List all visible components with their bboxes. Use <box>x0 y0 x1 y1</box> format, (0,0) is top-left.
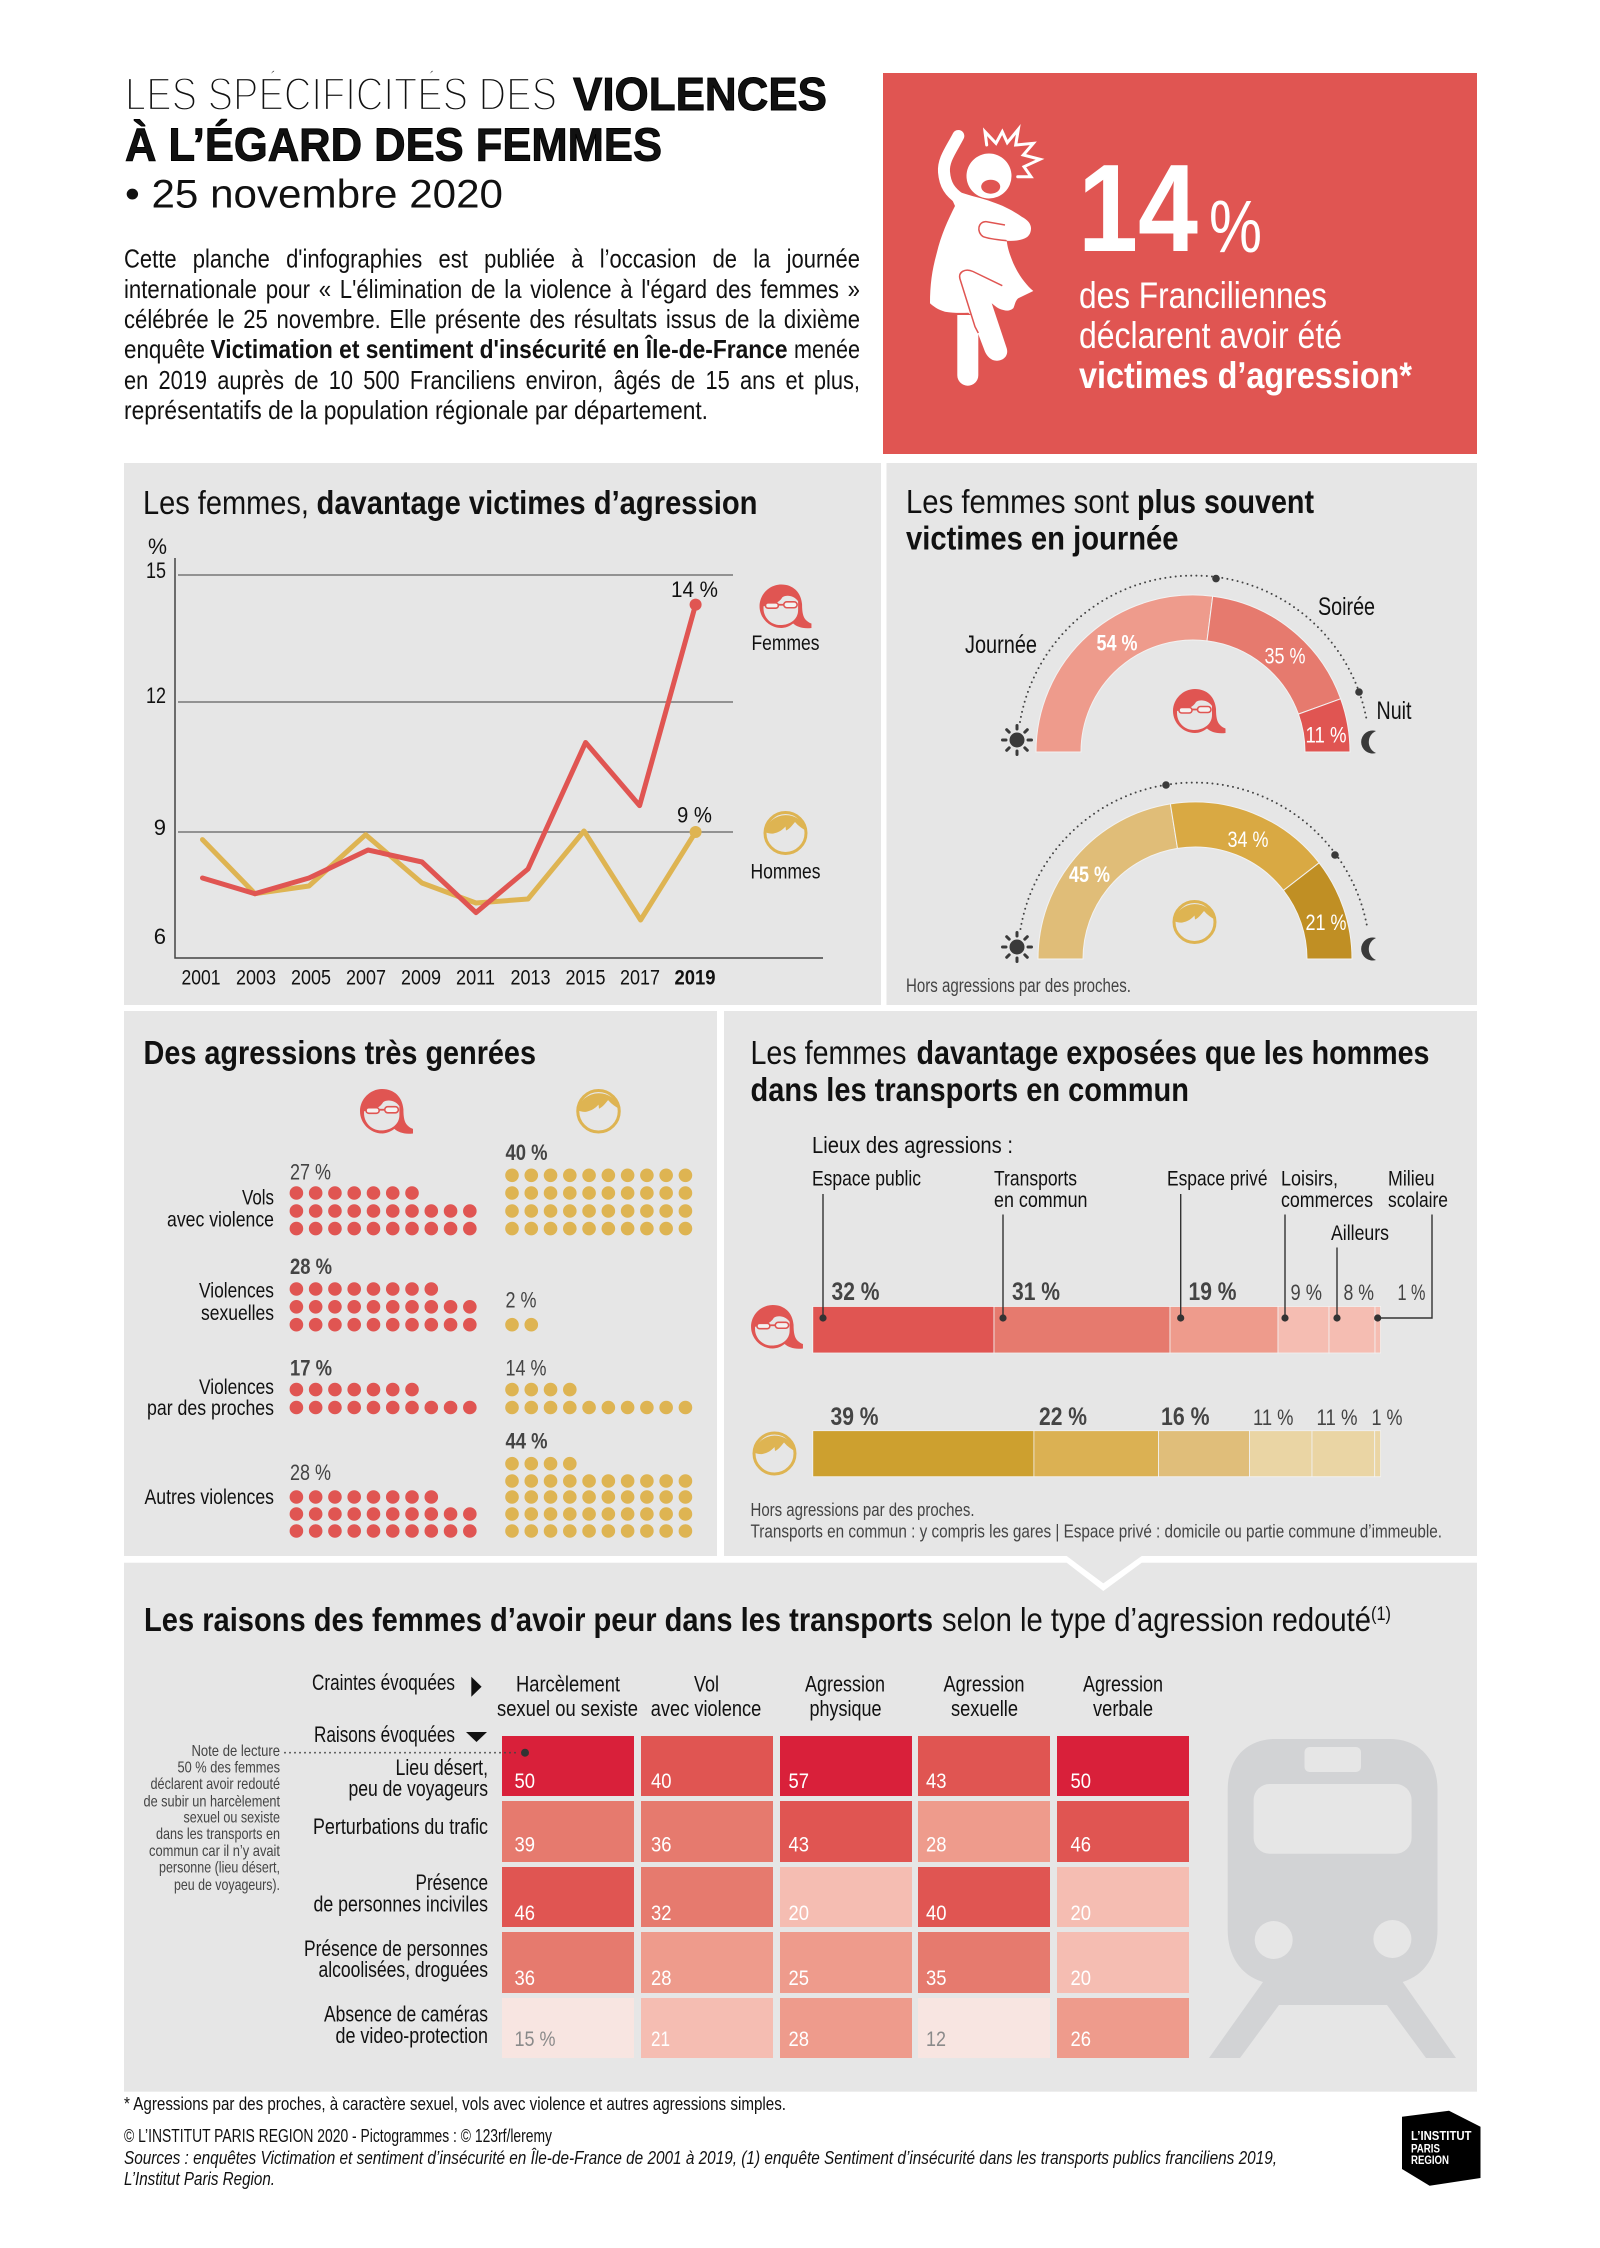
footnote: * Agressions par des proches, à caractère sexuel, vols avec violence et autres agressions simples. <box>124 2094 786 2114</box>
percent labels <box>290 1140 548 1485</box>
row labels: alcoolisées, droguées <box>318 1957 488 1982</box>
legend: femmes: Femmes <box>752 632 820 655</box>
panel: time of day gauges <box>886 463 1477 1005</box>
column headers: Agression <box>805 1672 885 1696</box>
values: hommes: 11 % <box>1316 1405 1358 1430</box>
heatmap row: absence de caméras <box>502 1998 1189 2058</box>
percent labels: 40 % <box>506 1140 548 1165</box>
intro paragraph: menée <box>794 334 860 364</box>
heatmap row: personnes inciviles: 20 <box>788 1902 809 1925</box>
row labels: Présence de personnes <box>304 1936 488 1961</box>
category labels: Milieu <box>1388 1168 1434 1190</box>
column headers: Agression <box>944 1672 1024 1696</box>
row labels: peu de voyageurs <box>348 1776 488 1801</box>
key figure caption: victimes d’agression* <box>1079 355 1413 396</box>
big number: 14 <box>1078 140 1198 278</box>
column headers <box>497 1672 1163 1721</box>
row labels: avec violence <box>167 1208 274 1232</box>
line: femmes <box>202 599 702 913</box>
gauge: femmes <box>965 575 1412 754</box>
heatmap row: personnes alcoolisées: 20 <box>1070 1967 1091 1990</box>
x axis labels: 2015 <box>566 966 606 990</box>
y axis labels: % <box>148 534 167 559</box>
heading: Les raisons des femmes d’avoir peur dans les transports <box>144 1601 933 1638</box>
gauge: femmes: Soirée <box>1318 593 1375 621</box>
axis titles: Craintes évoquées <box>312 1670 455 1695</box>
column headers: Agression <box>1083 1672 1163 1696</box>
x axis labels: 2007 <box>346 966 386 990</box>
values: femmes: 1 % <box>1398 1280 1426 1305</box>
category labels: Espace public <box>812 1168 921 1190</box>
row labels: Présence <box>416 1870 488 1895</box>
values: hommes: 16 % <box>1161 1403 1210 1431</box>
heading: dans les transports en commun <box>750 1071 1189 1108</box>
title <box>125 68 827 216</box>
big number: % <box>1209 185 1262 268</box>
row labels: Autres violences <box>144 1486 274 1509</box>
x axis labels: 2009 <box>401 966 441 990</box>
heatmap row: absence de caméras: 12 <box>926 2028 946 2051</box>
credits and sources <box>124 2126 1277 2189</box>
row labels: de personnes inciviles <box>314 1892 488 1916</box>
heading: Les femmes sont <box>906 483 1129 520</box>
dots: hommes <box>512 1175 686 1531</box>
intro paragraph: internationale pour « L'élimination de la violence à l'égard des femmes » <box>124 274 860 304</box>
category labels: scolaire <box>1388 1189 1448 1212</box>
credits and sources: Sources : enquêtes Victimation et sentiment d’insécurité en Île-de-France de 2001 à 2019, (1) enquête Sentiment d’insécurité dans les transports publics franciliens 2019, <box>124 2148 1277 2168</box>
category labels: commerces <box>1281 1189 1373 1212</box>
y axis labels: 15 <box>146 558 166 583</box>
heading: (1) <box>1371 1604 1391 1625</box>
reading note: commun car il n’y avait <box>149 1843 280 1860</box>
icon: homme <box>754 1433 796 1474</box>
values: hommes: 1 % <box>1372 1405 1402 1430</box>
reading note pointer <box>285 1749 529 1757</box>
heatmap row: lieu désert: 50 <box>514 1770 535 1793</box>
intro paragraph: Cette planche d'infographies est publiée à l’occasion de la journée <box>124 244 860 274</box>
column headers: verbale <box>1093 1696 1153 1721</box>
x axis labels: 2017 <box>620 966 660 990</box>
heatmap row: personnes alcoolisées: 35 <box>926 1967 946 1990</box>
gauge: femmes: 35 % <box>1264 644 1306 668</box>
pointer chevron <box>1067 1556 1142 1591</box>
row labels: Lieu désert, <box>396 1755 488 1780</box>
x axis labels: 2011 <box>456 966 495 990</box>
end value: hommes: 9 % <box>677 802 712 828</box>
key figure caption <box>1079 275 1413 396</box>
heatmap row: personnes alcoolisées <box>502 1932 1189 1993</box>
percent labels: 44 % <box>506 1428 548 1454</box>
heading: Des agressions très genrées <box>144 1034 536 1071</box>
icon: homme <box>577 1091 620 1132</box>
percent labels: 27 % <box>290 1160 331 1184</box>
reading note: peu de voyageurs). <box>174 1877 280 1894</box>
row labels: Absence de caméras <box>324 2002 488 2026</box>
heatmap row: perturbations du trafic: 28 <box>926 1834 946 1856</box>
category labels: Loisirs, <box>1281 1168 1338 1190</box>
heatmap row: personnes inciviles: 20 <box>1070 1902 1091 1925</box>
y axis labels: 12 <box>146 683 166 708</box>
legend: hommes: Hommes <box>750 860 820 884</box>
heatmap row: perturbations du trafic: 43 <box>788 1834 809 1856</box>
values: hommes: 11 % <box>1253 1405 1294 1430</box>
notes <box>750 1500 1442 1542</box>
panel: reasons for fear in transport <box>124 1556 1477 2092</box>
values: hommes: 39 % <box>830 1403 878 1431</box>
heatmap <box>502 1736 1189 2058</box>
row labels: Perturbations du trafic <box>313 1814 488 1839</box>
values: femmes: 9 % <box>1290 1280 1322 1305</box>
reading note: personne (lieu désert, <box>159 1860 280 1876</box>
values: femmes: 31 % <box>1012 1278 1060 1306</box>
percent labels: 14 % <box>506 1356 546 1380</box>
category labels: Transports <box>994 1168 1077 1190</box>
row labels: Vols <box>242 1186 274 1210</box>
heatmap row: perturbations du trafic: 36 <box>651 1834 672 1856</box>
note: Hors agressions par des proches. <box>906 976 1131 997</box>
reading note: 50 % des femmes <box>178 1760 280 1776</box>
heatmap row: lieu désert: 57 <box>788 1770 809 1793</box>
key figure caption: déclarent avoir été <box>1079 315 1342 356</box>
stacked bar: femmes <box>813 1306 1381 1353</box>
column headers: Vol <box>694 1672 719 1696</box>
reading note: dans les transports en <box>156 1826 280 1843</box>
legend title: Lieux des agressions : <box>812 1132 1013 1158</box>
icon: train <box>1209 1739 1456 2058</box>
row labels <box>304 1755 488 2048</box>
intro paragraph: Victimation et sentiment d'insécurité en Île-de-France <box>210 334 788 364</box>
gauge: femmes: 54 % <box>1096 630 1138 656</box>
panel: line chart <box>124 463 881 1005</box>
heading <box>750 1034 1430 1108</box>
reading note <box>144 1743 280 1894</box>
values: femmes: 19 % <box>1188 1278 1236 1306</box>
panel: dot matrix gendered aggressions <box>124 1011 717 1556</box>
panel: places of aggressions <box>724 1011 1477 1556</box>
logo: L’INSTITUT <box>1411 2128 1472 2143</box>
icon: woman being attacked <box>930 129 1040 386</box>
reading note: de subir un harcèlement <box>144 1794 280 1810</box>
logo: PARIS <box>1411 2144 1440 2156</box>
heading: Les femmes, <box>143 484 309 521</box>
panel: key figure 14 % <box>883 73 1477 454</box>
heatmap row: lieu désert: 50 <box>1070 1770 1091 1793</box>
row labels <box>144 1186 274 1509</box>
row labels: sexuelles <box>201 1302 274 1325</box>
heatmap row: personnes alcoolisées: 25 <box>788 1967 809 1990</box>
heatmap row: personnes inciviles <box>502 1867 1189 1927</box>
heading: victimes en journée <box>906 520 1178 556</box>
axis titles: Raisons évoquées <box>314 1722 455 1747</box>
column headers: sexuelle <box>951 1696 1018 1721</box>
heading <box>906 483 1314 556</box>
gauge: femmes: Journée <box>965 631 1037 659</box>
intro paragraph <box>124 244 860 425</box>
line chart: axes and grid <box>175 558 823 958</box>
heatmap row: personnes inciviles: 40 <box>926 1902 946 1925</box>
values: femmes: 8 % <box>1344 1280 1374 1305</box>
reading note: Note de lecture <box>192 1743 280 1760</box>
heatmap row: absence de caméras: 15 % <box>514 2028 556 2051</box>
title: À L’ÉGARD DES FEMMES <box>125 118 662 170</box>
row labels: de video-protection <box>336 2023 488 2048</box>
legend: hommes <box>750 812 820 884</box>
end value: femmes: 14 % <box>671 577 718 602</box>
heatmap row: personnes inciviles: 46 <box>514 1902 535 1925</box>
values: hommes <box>830 1403 1402 1431</box>
reading note: sexuel ou sexiste <box>184 1810 280 1826</box>
category labels: Espace privé <box>1167 1168 1268 1190</box>
percent labels: 28 % <box>290 1460 331 1485</box>
x axis labels: 2005 <box>291 966 331 990</box>
x axis labels: 2001 <box>182 966 220 990</box>
key figure caption: des Franciliennes <box>1079 275 1327 316</box>
title: • 25 novembre 2020 <box>125 172 503 216</box>
gauge: femmes: Nuit <box>1376 697 1412 725</box>
gauge: hommes <box>1002 781 1376 962</box>
heatmap row: lieu désert: 40 <box>651 1770 672 1793</box>
intro paragraph: enquête <box>124 334 205 364</box>
logo <box>1402 2111 1480 2186</box>
notes: Transports en commun : y compris les gares | Espace privé : domicile ou partie commune d’immeuble. <box>750 1522 1442 1542</box>
gauge: hommes: 21 % <box>1306 910 1346 935</box>
heatmap row: perturbations du trafic: 46 <box>1070 1834 1091 1856</box>
heatmap row: perturbations du trafic: 39 <box>514 1834 535 1856</box>
heading: Les femmes <box>750 1034 906 1071</box>
values: femmes <box>832 1278 1426 1306</box>
notes: Hors agressions par des proches. <box>750 1500 974 1520</box>
y axis labels: 6 <box>154 924 166 949</box>
intro paragraph: représentatifs de la population régionale par département. <box>124 395 708 425</box>
x axis labels: 2003 <box>236 966 276 990</box>
x axis labels: 2019 <box>674 966 716 990</box>
values: hommes: 22 % <box>1039 1403 1087 1431</box>
legend: femmes <box>752 584 820 655</box>
intro paragraph: célébrée le 25 novembre. Elle présente des résultats issus de la dixième <box>124 304 860 334</box>
heatmap row: lieu désert <box>502 1736 1189 1796</box>
gauge: hommes: 45 % <box>1069 862 1110 887</box>
values: femmes: 32 % <box>832 1278 880 1306</box>
intro paragraph: en 2019 auprès de 10 500 Franciliens environ, âgés de 15 ans et plus, <box>124 365 860 395</box>
row labels: par des proches <box>147 1397 274 1420</box>
heatmap row: personnes alcoolisées: 36 <box>514 1967 535 1990</box>
x axis labels <box>182 966 716 990</box>
heatmap row: personnes alcoolisées: 28 <box>651 1967 672 1990</box>
icon: femme <box>751 1305 803 1349</box>
column headers: sexuel ou sexiste <box>497 1696 638 1721</box>
y axis labels <box>146 534 167 949</box>
y axis labels: 9 <box>154 815 166 840</box>
credits and sources: © L’INSTITUT PARIS REGION 2020 - Pictogrammes : © 123rf/leremy <box>124 2126 552 2146</box>
column headers: physique <box>810 1696 882 1721</box>
title: VIOLENCES <box>573 68 827 120</box>
heading <box>143 484 758 521</box>
heatmap row: absence de caméras: 26 <box>1070 2028 1091 2051</box>
reading note: déclarent avoir redouté <box>150 1776 280 1793</box>
column headers: avec violence <box>651 1696 761 1721</box>
heading: plus souvent <box>1137 483 1314 520</box>
stacked bar: hommes <box>813 1431 1381 1477</box>
gauge: hommes: 34 % <box>1228 827 1268 852</box>
percent labels: 17 % <box>290 1356 332 1380</box>
category labels: Ailleurs <box>1331 1222 1389 1245</box>
heatmap row: lieu désert: 43 <box>926 1770 946 1793</box>
percent labels: 2 % <box>506 1288 536 1312</box>
x axis labels: 2013 <box>510 966 550 990</box>
axis titles <box>312 1670 487 1747</box>
title: LES SPÉCIFICITÉS DES <box>125 68 557 120</box>
row labels: Violences <box>199 1280 274 1302</box>
column headers: Harcèlement <box>516 1672 620 1696</box>
heatmap row: absence de caméras: 28 <box>788 2028 809 2051</box>
dots: femmes <box>296 1193 470 1531</box>
row labels: Violences <box>199 1376 274 1399</box>
icon: femme <box>360 1089 413 1134</box>
heading: selon le type d’agression redouté <box>942 1601 1371 1638</box>
logo: REGION <box>1411 2155 1449 2167</box>
heatmap row: perturbations du trafic <box>502 1801 1189 1862</box>
percent labels: 28 % <box>290 1254 332 1279</box>
heading: davantage victimes d’agression <box>316 484 758 521</box>
heatmap row: personnes inciviles: 32 <box>651 1902 672 1925</box>
leader lines <box>819 1194 1432 1322</box>
heatmap row: absence de caméras: 21 <box>651 2028 670 2051</box>
category labels: en commun <box>994 1189 1088 1212</box>
category labels <box>812 1168 1448 1245</box>
heading: davantage exposées que les hommes <box>916 1034 1430 1071</box>
gauge: femmes: 11 % <box>1306 722 1346 748</box>
credits and sources: L’Institut Paris Region. <box>124 2169 275 2189</box>
line: hommes <box>202 826 702 920</box>
